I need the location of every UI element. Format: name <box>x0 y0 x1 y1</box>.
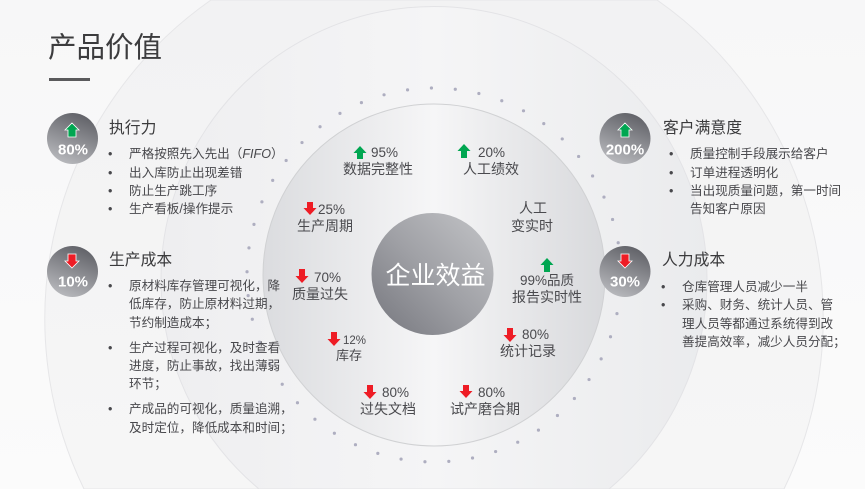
heading: 人力成本 <box>662 251 725 269</box>
list: 生产过程可视化，及时查看 <box>129 340 280 355</box>
metric: 统计记录 80% down <box>500 327 556 359</box>
list: 当出现质量问题，第一时间 <box>690 184 841 198</box>
badge: 10% down: 10% <box>58 274 88 290</box>
metric: 人工变实时 <box>511 200 553 234</box>
metric: 库存 12% down: 12% <box>343 335 366 347</box>
metric: 人工变实时: 变实时 <box>511 218 553 234</box>
list: • <box>108 341 112 355</box>
list: • <box>108 279 112 293</box>
list: • <box>661 280 665 294</box>
list: 采购、财务、统计人员、管 <box>682 297 833 312</box>
metric: 试产磨合期 80% down: 试产磨合期 <box>450 401 520 417</box>
center circle: 企业效益: 企业效益 <box>385 262 486 290</box>
center circle: 企业效益 <box>372 213 494 335</box>
dotted orbit <box>247 88 621 462</box>
panel: 人力成本 <box>600 246 846 350</box>
metric: 品质报告实时性 99% up: 99%品质 <box>520 273 574 288</box>
heading: 生产成本 <box>109 251 172 269</box>
badge: 30% down: 30% <box>610 274 640 290</box>
list: 环节； <box>129 377 167 392</box>
title underline <box>49 78 90 81</box>
metric: 质量过失 70% down <box>292 269 348 302</box>
metric: 人工绩效 20% up: 人工绩效 <box>463 161 519 177</box>
badge: 80% up <box>47 113 98 164</box>
metric: 统计记录 80% down: 统计记录 <box>500 343 556 359</box>
list <box>669 146 841 216</box>
metric: 生产周期 25% down: 生产周期 <box>297 218 353 234</box>
list: • <box>108 402 112 416</box>
metric: 过失文档 80% down <box>360 385 416 417</box>
list: • <box>669 147 673 161</box>
list <box>108 146 284 216</box>
metric: 质量过失 70% down: 70% <box>314 270 341 285</box>
badge: 30% down <box>600 246 650 297</box>
list: 理人员等都通过系统得到改 <box>682 316 834 331</box>
badge: 80% up: 80% <box>58 142 88 158</box>
list <box>108 278 293 436</box>
panel: 客户满意度 <box>600 113 841 216</box>
metric: 数据完整性 95% up: 95% <box>371 145 398 160</box>
metric: 人工绩效 20% up: 20% <box>478 145 505 160</box>
list: 节约制造成本； <box>129 316 217 331</box>
list: 原材料库存管理可视化，降 <box>129 278 281 293</box>
metric: 品质报告实时性 99% up: 报告实时性 <box>512 289 582 305</box>
list: 生产看板/操作提示 <box>129 201 233 216</box>
metric: 生产周期 25% down: 25% <box>318 202 345 217</box>
list: 订单进程透明化 <box>690 166 779 180</box>
metric: 库存 12% down: 库存 <box>336 348 362 363</box>
list: • <box>108 166 112 180</box>
list: 质量控制手段展示给客户 <box>690 146 829 161</box>
metric: 数据完整性 95% up <box>343 145 413 177</box>
list: 进度，防止事故，找出薄弱 <box>129 358 280 373</box>
inner disc <box>263 104 605 446</box>
title: 产品价值 <box>48 32 162 64</box>
list: 严格按照先入先出（FIFO） <box>129 146 284 161</box>
metric: 人工变实时: 人工 <box>519 200 547 216</box>
metric: 数据完整性 95% up: 数据完整性 <box>343 161 413 177</box>
list: 产成品的可视化，质量追溯， <box>129 401 293 416</box>
list: • <box>108 184 112 198</box>
panel: 生产成本 <box>47 246 293 436</box>
metric: 品质报告实时性 99% up <box>512 258 582 305</box>
list: 低库存，防止原材料过期， <box>129 296 280 311</box>
metric: 过失文档 80% down: 80% <box>382 385 409 400</box>
metric: 统计记录 80% down: 80% <box>522 327 549 342</box>
list: 防止生产跳工序 <box>129 183 217 198</box>
list: 出入库防止出现差错 <box>129 165 243 180</box>
list: 善提高效率，减少人员分配； <box>682 334 846 350</box>
heading: 执行力 <box>109 119 156 137</box>
metric: 库存 12% down <box>328 332 366 363</box>
panel: 执行力 <box>47 113 284 216</box>
metric: 试产磨合期 80% down: 80% <box>478 385 505 400</box>
list: • <box>669 166 673 180</box>
list: • <box>108 202 112 216</box>
metric: 人工绩效 20% up <box>458 144 519 177</box>
list: • <box>108 147 112 161</box>
badge: 200% up: 200% <box>606 142 644 158</box>
list: • <box>669 184 673 198</box>
list: 仓库管理人员减少一半 <box>682 279 808 294</box>
list <box>661 279 846 350</box>
metric: 质量过失 70% down: 质量过失 <box>292 286 348 302</box>
concentric ring: middle <box>161 6 707 489</box>
badge: 200% up <box>600 113 650 164</box>
metric: 生产周期 25% down <box>297 202 353 234</box>
badge: 10% down <box>47 246 98 297</box>
metric: 过失文档 80% down: 过失文档 <box>360 401 416 417</box>
heading: 客户满意度 <box>663 118 742 137</box>
list: • <box>661 298 665 312</box>
metric: 试产磨合期 80% down <box>450 385 520 417</box>
list: 及时定位，降低成本和时间； <box>129 421 293 436</box>
list: 告知客户原因 <box>690 201 766 216</box>
